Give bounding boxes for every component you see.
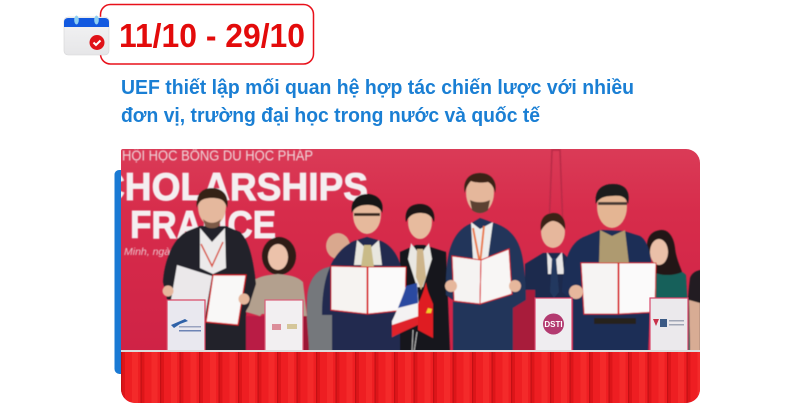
heading: đơn vị, trường đại học trong nước và quốc tế <box>121 105 541 127</box>
icon: calendar <box>64 16 109 55</box>
man 6 <box>525 213 572 352</box>
backdrop text: FRANCE <box>130 204 276 247</box>
placard: Vietnam France logo <box>650 298 688 351</box>
woman in green <box>647 230 690 351</box>
date badge <box>100 4 314 64</box>
backdrop text <box>121 149 368 258</box>
placard: DSTI logo <box>535 298 572 351</box>
placard: CCI logo <box>265 300 303 351</box>
man 4 <box>400 204 450 352</box>
man 3 <box>322 194 408 352</box>
placard: SOA logo <box>167 300 205 351</box>
flags <box>392 282 433 352</box>
woman in beige <box>246 237 307 316</box>
chairs behind <box>239 290 535 352</box>
backdrop <box>121 149 700 404</box>
photo: signing ceremony <box>98 146 702 404</box>
backdrop text: Minh, ngày <box>124 246 176 258</box>
table with red cloth <box>121 350 700 404</box>
heading <box>121 77 634 127</box>
man 1 <box>162 188 256 352</box>
man 5 <box>445 173 526 352</box>
backdrop text: HỘI HỌC BỔNG DU HỌC PHÁP <box>122 146 313 164</box>
backdrop text: CHOLARSHIPS <box>98 166 368 209</box>
accent bar <box>114 170 123 374</box>
date text: 11/10 - 29/10 <box>119 17 305 54</box>
heading: UEF thiết lập mối quan hệ hợp tác chiến lược với nhiều <box>121 77 634 99</box>
placard: DSTI logo: DSTI <box>544 320 563 329</box>
faint eiffel tower on backdrop <box>549 150 563 230</box>
man 7 <box>562 184 656 352</box>
far right person <box>687 270 702 352</box>
bald man <box>307 233 353 352</box>
